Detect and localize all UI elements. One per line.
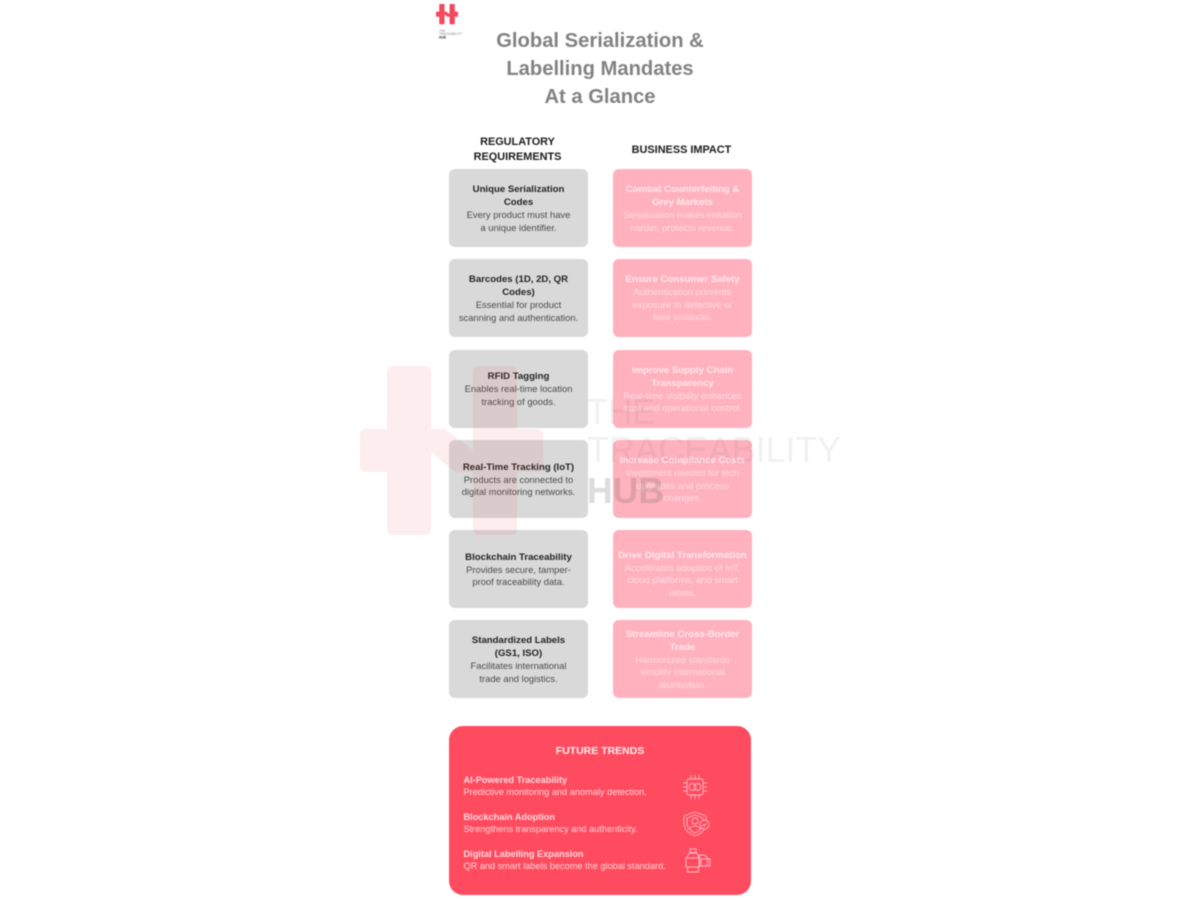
card: RFID tagging: RFID Tagging: [488, 371, 549, 382]
card: RFID tagging: [449, 350, 588, 428]
logo mark: [436, 4, 458, 24]
heading: business impact: BUSINESS IMPACT: [632, 144, 731, 156]
card: standardized labels: (GS1, ISO): [495, 648, 542, 659]
trend: AI-powered traceability: AI-Powered Traceability: [464, 775, 567, 785]
card: unique serialization codes: Codes: [504, 197, 533, 208]
heading: regulatory requirements: REGULATORY: [480, 136, 555, 148]
title: Global Serialization &: [496, 30, 704, 52]
trend: AI-powered traceability: Predictive monitoring and anomaly detection.: [464, 787, 647, 797]
card: standardized labels: Standardized Labels: [472, 635, 565, 646]
trend: digital labelling expansion: QR and smart labels become the global standard.: [464, 861, 666, 871]
card: barcodes: Barcodes (1D, 2D, QR: [469, 274, 568, 285]
card: cross-border trade: Harmonized standards: [635, 654, 730, 665]
card: combat counterfeiting: Serialization makes imitation: [623, 209, 742, 220]
logo wordmark: [439, 29, 463, 40]
icon: shield with person: [683, 811, 710, 837]
watermark wordmark: [587, 391, 841, 511]
card: combat counterfeiting: [613, 169, 752, 247]
icon: AI chip: [682, 774, 708, 800]
title: At a Glance: [544, 86, 656, 108]
logo wordmark: THE: [439, 29, 445, 33]
heading: regulatory requirements: REQUIREMENTS: [474, 151, 561, 163]
card: unique serialization codes: Unique Serialization: [473, 184, 564, 195]
future trends heading: FUTURE TRENDS: [556, 745, 644, 757]
watermark wordmark: HUB: [587, 470, 664, 511]
card: RFID tagging: Enables real-time location: [465, 383, 572, 394]
panel: future trends: [449, 726, 751, 895]
card: supply chain transparency: Improve Supply Chain: [632, 365, 733, 376]
watermark mark: [360, 366, 543, 535]
card: combat counterfeiting: harder, protects revenue.: [630, 222, 735, 232]
card: real-time tracking: digital monitoring networks.: [462, 486, 575, 497]
card: cross-border trade: distribution.: [659, 679, 706, 690]
logo wordmark: TRACEABILITY: [439, 32, 463, 36]
card: standardized labels: trade and logistics.: [479, 672, 558, 684]
card: consumer safety: fake products.: [653, 311, 712, 322]
card: compliance costs: changes.: [663, 492, 702, 503]
card: compliance costs: Investment needed for tech: [626, 467, 739, 478]
card: blockchain traceability: Provides secure, tamper-: [466, 564, 571, 575]
trend: blockchain adoption: [463, 812, 638, 835]
title: Labelling Mandates: [506, 58, 694, 80]
card: cross-border trade: simplify international: [640, 666, 725, 677]
logo wordmark: HUB: [439, 36, 447, 40]
card: compliance costs: [613, 440, 752, 518]
card: barcodes: Essential for product: [476, 299, 561, 310]
card: unique serialization codes: Every product must have: [467, 209, 570, 220]
card: blockchain traceability: Blockchain Traceability: [465, 552, 572, 563]
card: unique serialization codes: [449, 169, 588, 247]
card: barcodes: Codes): [502, 287, 535, 298]
card: barcodes: [449, 259, 588, 337]
card: standardized labels: [449, 620, 588, 698]
card: consumer safety: [613, 259, 752, 337]
card: combat counterfeiting: Grey Markets: [652, 197, 713, 208]
trend: blockchain adoption: Blockchain Adoption: [464, 812, 555, 822]
logo: [435, 3, 463, 40]
card: blockchain traceability: proof traceability data.: [472, 576, 565, 587]
trend: digital labelling expansion: Digital Labelling Expansion: [464, 849, 583, 859]
watermark wordmark: TRACEABILITY: [587, 429, 841, 470]
card: digital transformation: Drive Digital Transformation: [618, 550, 747, 561]
card: cross-border trade: Streamline Cross-Border: [626, 629, 739, 640]
card: barcodes: scanning and authentication.: [459, 312, 578, 322]
card: compliance costs: upgrades and process: [636, 480, 729, 491]
card: digital transformation: Accelerates adoption of IoT,: [625, 562, 740, 573]
title: [496, 30, 704, 108]
card: digital transformation: [613, 530, 752, 608]
card: cross-border trade: [613, 620, 752, 698]
heading: regulatory requirements: [474, 136, 562, 164]
trend: blockchain adoption: Strengthens transparency and authenticity.: [464, 824, 638, 834]
card: combat counterfeiting: Combat Counterfeiting &: [626, 184, 739, 195]
watermark wordmark: THE: [587, 391, 655, 432]
card: standardized labels: Facilitates international: [471, 660, 566, 671]
card: blockchain traceability: [449, 530, 588, 608]
card: supply chain transparency: [613, 350, 752, 428]
card: supply chain transparency: trust and operational control.: [623, 402, 742, 413]
card: supply chain transparency: Transparency: [651, 378, 714, 389]
card: consumer safety: exposure to defective or: [632, 299, 733, 310]
card: consumer safety: Ensure Consumer Safety: [625, 274, 740, 285]
card: supply chain transparency: Real-time visibility enhances: [623, 390, 742, 401]
card: compliance costs: Increase Compliance Costs: [620, 455, 745, 466]
card: real-time tracking: Real-Time Tracking (IoT): [463, 462, 574, 473]
card: cross-border trade: Trade: [670, 642, 695, 653]
card: RFID tagging: tracking of goods.: [481, 396, 556, 406]
card: digital transformation: labels.: [669, 587, 696, 598]
icon: bottle and labels: [684, 848, 712, 874]
trend: digital labelling expansion: [463, 849, 666, 872]
trend: AI-powered traceability: [463, 775, 647, 798]
card: real-time tracking: Products are connected to: [464, 474, 573, 485]
card: digital transformation: cloud platforms, and smart: [627, 574, 738, 585]
card: unique serialization codes: a unique identifier.: [480, 222, 557, 232]
card: consumer safety: Authentication prevents: [634, 286, 731, 297]
card: real-time tracking: [449, 440, 588, 518]
